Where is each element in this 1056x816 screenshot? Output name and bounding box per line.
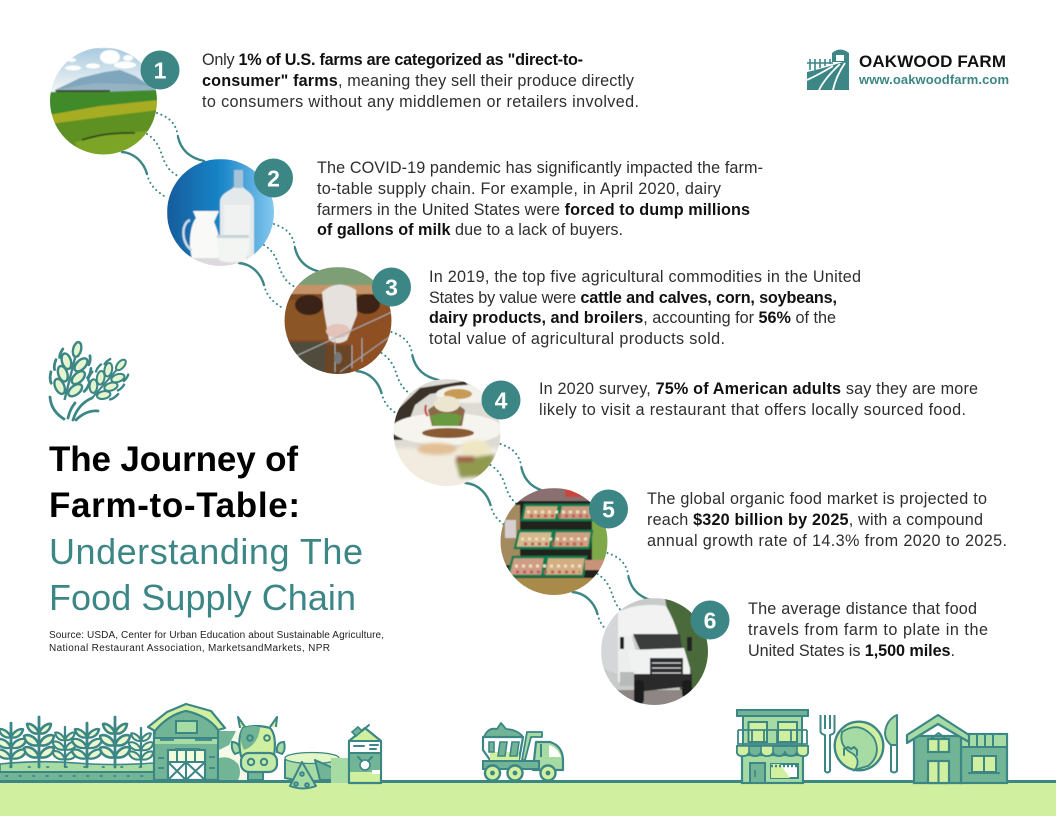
text block 6: travels from farm to plate in the bbox=[748, 621, 988, 639]
number badge 2: 2 bbox=[267, 166, 280, 192]
text block 2 bbox=[317, 159, 763, 239]
step 1: farm field bbox=[48, 48, 180, 160]
text block 4: In 2020 survey, 75% of American adults say they are more bbox=[539, 380, 978, 398]
photo: white freight truck bbox=[601, 598, 710, 706]
text block 1: to consumers without any middlemen or retailers involved. bbox=[202, 93, 639, 111]
illustration: dump truck bbox=[483, 723, 563, 780]
photo: green farm field bbox=[48, 48, 160, 160]
number badge 4: 4 bbox=[495, 388, 508, 414]
text block 2: The COVID-19 pandemic has significantly impacted the farm- bbox=[317, 159, 763, 177]
text block 3: total value of agricultural products sold. bbox=[429, 330, 725, 348]
illustration: house bbox=[907, 715, 1007, 783]
source note: National Restaurant Association, MarketsandMarkets, NPR bbox=[49, 643, 330, 654]
icon: wheat ears bbox=[45, 337, 138, 420]
text block 4: likely to visit a restaurant that offers locally sourced food. bbox=[539, 401, 966, 419]
step 6: truck bbox=[601, 598, 730, 706]
source note bbox=[49, 630, 384, 654]
title bbox=[49, 440, 363, 618]
illustration: cow bbox=[219, 717, 285, 780]
illustration: storefront bbox=[737, 710, 808, 783]
text block 3 bbox=[429, 268, 861, 348]
subtitle: Understanding The bbox=[49, 531, 363, 572]
number badge 6: 6 bbox=[704, 608, 716, 634]
number badge 3: 3 bbox=[385, 274, 398, 300]
step 5: produce market bbox=[500, 488, 628, 596]
text block 5: reach $320 billion by 2025, with a compound bbox=[647, 511, 983, 529]
photo: milk bottle and jug bbox=[167, 159, 275, 267]
illustration: cheese bbox=[285, 752, 339, 788]
text block 5: annual growth rate of 14.3% from 2020 to 2025. bbox=[647, 532, 1007, 550]
ground band bbox=[0, 780, 1056, 816]
text block 2: farmers in the United States were forced to dump millions bbox=[317, 201, 750, 219]
text block 6: United States is 1,500 miles. bbox=[748, 642, 955, 660]
number badge 5: 5 bbox=[602, 496, 615, 522]
website: www.oakwoodfarm.com bbox=[858, 72, 1009, 87]
subtitle bbox=[49, 531, 363, 618]
illustration: plate with fish, fork and knife bbox=[820, 715, 897, 772]
number badge 1: 1 bbox=[154, 58, 167, 84]
text block 2: of gallons of milk due to a lack of buyers. bbox=[317, 221, 623, 239]
step 2: milk bbox=[167, 158, 293, 267]
text block 6: The average distance that food bbox=[748, 600, 977, 618]
text block 5: The global organic food market is projected to bbox=[647, 490, 987, 508]
title: Farm-to-Table: bbox=[49, 486, 300, 525]
icon: plate with fish bbox=[835, 722, 883, 770]
text block 2: to-table supply chain. For example, in April 2020, dairy bbox=[317, 180, 722, 198]
illustration: barn bbox=[148, 704, 225, 780]
subtitle: Food Supply Chain bbox=[49, 577, 356, 618]
source note: Source: USDA, Center for Urban Education about Sustainable Agriculture, bbox=[49, 630, 384, 641]
photo: crates of produce bbox=[500, 488, 608, 596]
title: The Journey of bbox=[49, 440, 298, 479]
illustration: milk carton bbox=[331, 725, 381, 783]
step 3: cow bbox=[284, 267, 411, 375]
text block 3: States by value were cattle and calves, corn, soybeans, bbox=[429, 289, 837, 307]
text block 5 bbox=[647, 490, 1007, 550]
text block 6 bbox=[748, 600, 988, 660]
icon: fork bbox=[820, 715, 834, 772]
text block 4 bbox=[539, 380, 978, 419]
photo: restaurant plates bbox=[391, 379, 504, 488]
icon: knife bbox=[885, 715, 897, 772]
brand name: OAKWOOD FARM bbox=[859, 52, 1006, 71]
text block 3: dairy products, and broilers, accounting for 56% of the bbox=[429, 309, 836, 327]
photo: brown and white cow bbox=[284, 267, 392, 375]
illustration: wheat field bbox=[0, 717, 154, 780]
icon: farm field logo mark bbox=[807, 50, 849, 90]
step 4: plated food bbox=[391, 379, 520, 488]
text block 3: In 2019, the top five agricultural commodities in the United bbox=[429, 268, 861, 286]
dotted and solid connectors between steps bbox=[122, 113, 654, 638]
text block 1 bbox=[202, 51, 639, 111]
text block 1: consumer" farms, meaning they sell their produce directly bbox=[202, 72, 635, 90]
text block 1: Only 1% of U.S. farms are categorized as "direct-to- bbox=[202, 51, 583, 69]
logo: Oakwood Farm bbox=[807, 50, 1009, 90]
